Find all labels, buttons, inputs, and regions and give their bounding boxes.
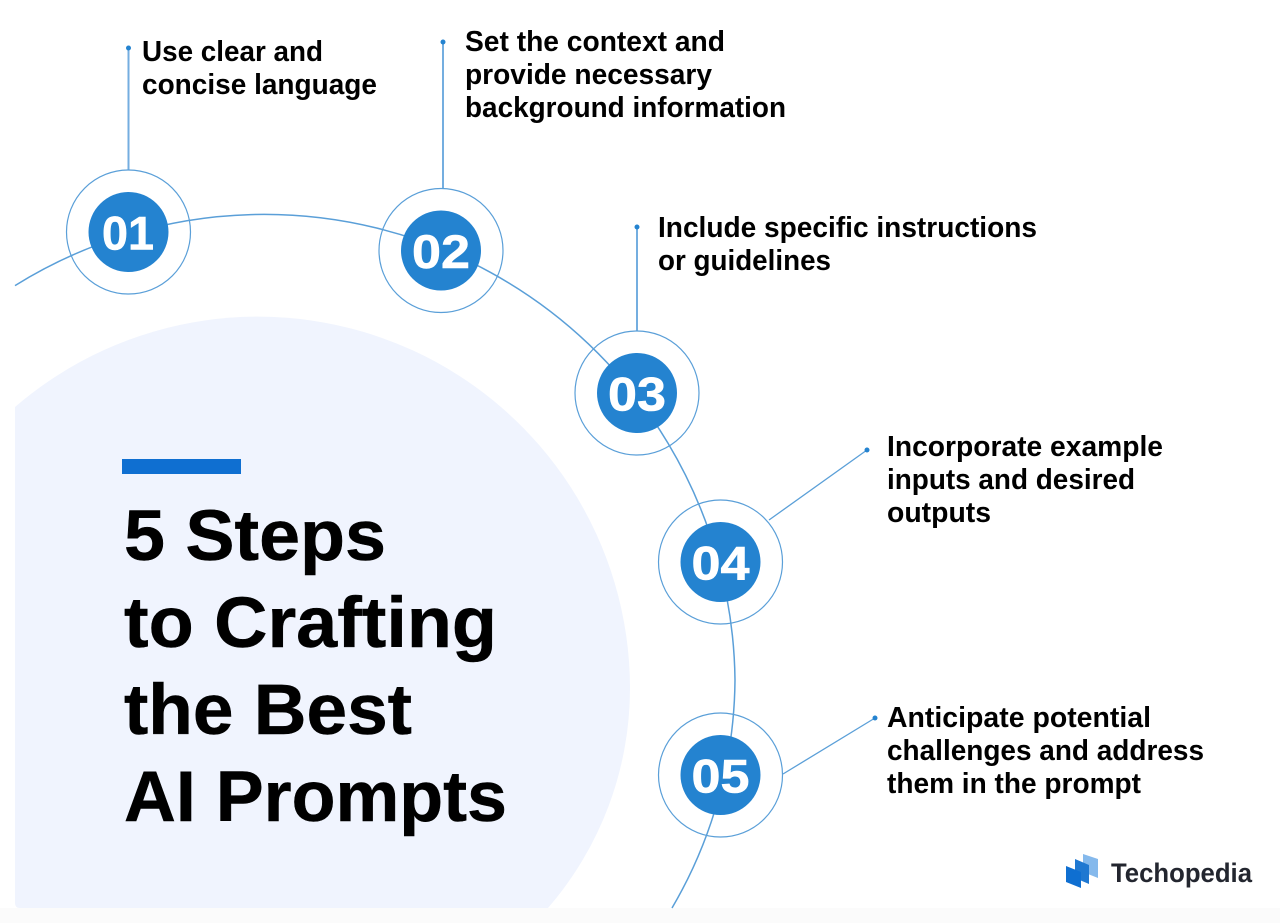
step 04: Incorporate example [887, 431, 1163, 463]
step 02: provide necessary [465, 59, 712, 91]
title: to Crafting [124, 584, 497, 663]
title: 5 Steps [124, 497, 386, 576]
step 05: them in the prompt [887, 768, 1141, 800]
step 01: 01 [102, 206, 154, 260]
title: the Best [124, 671, 412, 750]
logo: Techopedia: Techopedia [1111, 858, 1253, 888]
background panel: pale blue circle [15, 317, 630, 908]
step 03: or guidelines [658, 245, 831, 277]
step 01 [66, 36, 377, 294]
step 01: concise language [142, 69, 377, 101]
step 04: inputs and desired [887, 464, 1135, 496]
step 02 [379, 26, 786, 312]
step 02: Set the context and [465, 26, 725, 58]
step 02: 02 [412, 225, 470, 278]
step 04: 04 [692, 536, 750, 590]
title: AI Prompts [124, 758, 507, 837]
step 04 [658, 431, 1163, 624]
logo: Techopedia [1066, 854, 1253, 888]
timeline arc [15, 214, 735, 908]
step 03: 03 [608, 368, 666, 420]
step 03: Include specific instructions [658, 212, 1037, 244]
step 05: Anticipate potential [887, 702, 1151, 734]
step 05: 05 [692, 750, 750, 802]
step 05 [658, 702, 1204, 837]
icon: logo blocks [1066, 854, 1098, 888]
heading accent bar [122, 459, 241, 474]
step 05: challenges and address [887, 735, 1204, 767]
step 01: Use clear and [142, 36, 323, 68]
step 04: outputs [887, 497, 991, 529]
title [124, 497, 507, 837]
step 02: background information [465, 92, 786, 124]
step 03 [575, 212, 1037, 455]
